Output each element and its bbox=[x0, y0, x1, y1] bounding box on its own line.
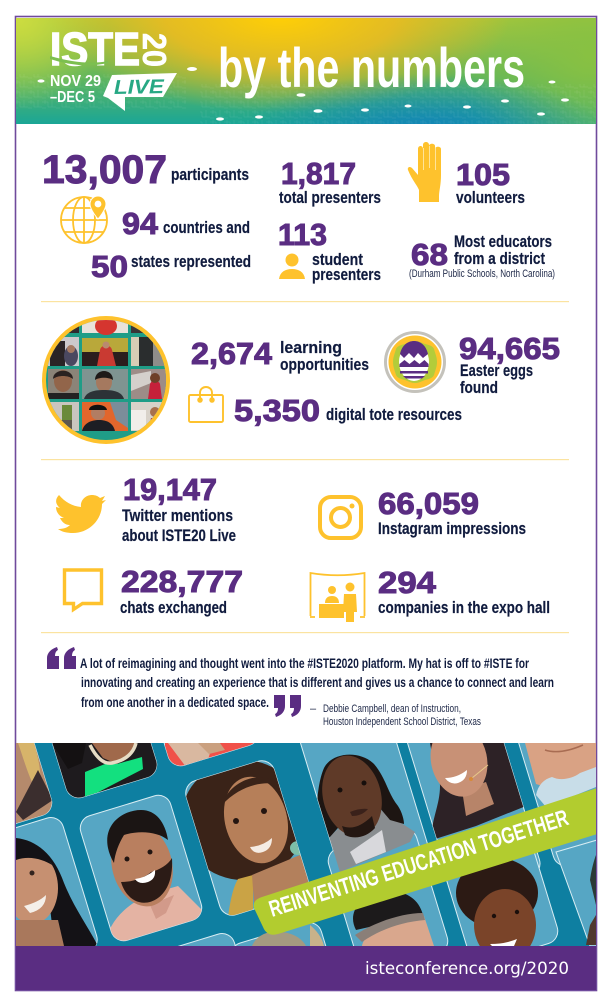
photo: woman with blonde hair bbox=[16, 743, 56, 823]
stat: student presenters: 113 bbox=[278, 217, 327, 252]
stat: companies in the expo hall: companies in the expo hall bbox=[378, 598, 550, 617]
photo: woman with short curly hair bbox=[456, 860, 538, 946]
footer bar bbox=[16, 946, 596, 990]
section: participants and presenters bbox=[42, 142, 555, 284]
stat: chats exchanged: chats exchanged bbox=[120, 598, 227, 617]
header banner bbox=[16, 18, 596, 124]
photo: man in black hat bbox=[353, 891, 434, 946]
quote attribution: – bbox=[310, 703, 317, 715]
icon: expo booth bbox=[310, 573, 365, 622]
icon: Instagram bbox=[320, 497, 361, 538]
stat: countries bbox=[122, 206, 250, 241]
header logo: ISTE20 Live: –DEC 5 bbox=[50, 89, 95, 106]
stat: companies in the expo hall bbox=[378, 565, 550, 617]
icon: chat bubble bbox=[64, 570, 102, 610]
stat: most educators from a district: Most educators bbox=[454, 232, 552, 251]
quote text bbox=[80, 655, 554, 710]
stat: most educators from a district bbox=[409, 232, 555, 280]
stat: volunteers: 105 bbox=[456, 157, 510, 192]
photo: woman in red bbox=[165, 743, 254, 766]
stat: total presenters bbox=[279, 156, 381, 207]
header logo: ISTE20 Live: LIVE bbox=[114, 76, 165, 99]
footer URL: isteconference.org/2020 bbox=[365, 959, 569, 979]
icon: globe with map pin bbox=[61, 196, 107, 243]
stat: student presenters bbox=[278, 217, 381, 284]
header logo: ISTE20 Live: 20 bbox=[136, 33, 173, 67]
photo: woman with headset bbox=[430, 743, 524, 838]
stat: Easter eggs found: 94,665 bbox=[459, 331, 560, 366]
stat: participants bbox=[42, 148, 249, 192]
stat: total presenters: 1,817 bbox=[281, 156, 356, 191]
testimonial quote bbox=[47, 647, 554, 728]
stat: Easter eggs found: found bbox=[460, 378, 498, 397]
stat: participants: participants bbox=[171, 165, 249, 184]
stat: chats exchanged: 228,777 bbox=[121, 564, 243, 599]
stat: most educators from a district: 68 bbox=[411, 237, 448, 272]
stat: Easter eggs found bbox=[459, 331, 560, 397]
stat: total presenters: total presenters bbox=[279, 188, 381, 207]
stat: learning opportunities bbox=[191, 336, 369, 374]
photo: woman with black hair bbox=[16, 838, 96, 946]
quote attribution: Debbie Campbell, dean of Instruction, bbox=[323, 703, 461, 715]
photo: smiling man top right bbox=[525, 743, 596, 807]
icon: raised hand bbox=[408, 142, 441, 202]
quote text: from one another in a dedicated space. bbox=[81, 694, 269, 710]
stat: learning opportunities: learning bbox=[280, 338, 342, 357]
icon: tote bag bbox=[189, 387, 223, 422]
section: social media and expo bbox=[56, 472, 550, 622]
stat: volunteers bbox=[456, 157, 525, 207]
stat: companies in the expo hall: 294 bbox=[378, 565, 437, 600]
stat: digital tote resources bbox=[234, 393, 462, 428]
stat: Twitter mentions: 19,147 bbox=[123, 472, 217, 507]
icon: Easter egg badge bbox=[386, 332, 444, 392]
stat: most educators from a district: from a district bbox=[454, 249, 545, 268]
stat: Instagram impressions: Instagram impressions bbox=[378, 519, 526, 538]
stat: most educators from a district: (Durham Public Schools, North Carolina) bbox=[409, 268, 555, 280]
photo: man with dreadlocks bbox=[314, 749, 415, 872]
stat: Twitter mentions: Twitter mentions bbox=[122, 506, 233, 525]
stat: student presenters: student bbox=[312, 250, 363, 269]
photo collage: video sessions circle bbox=[42, 316, 170, 444]
stat: Instagram impressions: 66,059 bbox=[378, 486, 479, 521]
header logo: ISTE20 Live bbox=[50, 23, 177, 111]
header logo: ISTE20 Live: NOV 29 bbox=[50, 73, 101, 90]
photo collage: educators bbox=[16, 743, 596, 946]
quote attribution bbox=[310, 703, 481, 728]
icon: opening quote marks bbox=[47, 647, 76, 669]
stat: Easter eggs found: Easter eggs bbox=[460, 361, 533, 380]
header logo: ISTE20 Live: ISTE bbox=[50, 23, 140, 75]
photo: partial heads at bottom bbox=[252, 855, 596, 946]
photo: woman with curly hair bbox=[186, 762, 308, 916]
stat: states: states represented bbox=[131, 252, 251, 271]
stat: participants: 13,007 bbox=[42, 148, 167, 192]
stat: learning opportunities: opportunities bbox=[280, 355, 369, 374]
stat: countries: countries and bbox=[163, 218, 250, 237]
stat: states bbox=[91, 249, 251, 284]
stat: Instagram impressions bbox=[378, 486, 526, 538]
stat: countries: 94 bbox=[122, 206, 159, 241]
stat: learning opportunities: 2,674 bbox=[191, 336, 273, 371]
icon: Twitter bird bbox=[56, 495, 106, 533]
stat: digital tote resources: digital tote resources bbox=[326, 405, 462, 424]
stat: chats exchanged bbox=[120, 564, 243, 617]
photo: woman in green shirt bbox=[52, 743, 157, 798]
section: learning bbox=[42, 316, 560, 444]
stat: volunteers: volunteers bbox=[456, 188, 525, 207]
stat: states: 50 bbox=[91, 249, 128, 284]
stat: student presenters: presenters bbox=[312, 265, 381, 284]
stat: digital tote resources: 5,350 bbox=[234, 393, 320, 428]
stat: Twitter mentions: about ISTE20 Live bbox=[122, 526, 236, 545]
photo: smiling bearded man bbox=[107, 810, 202, 941]
icon: person bbox=[279, 254, 305, 279]
quote attribution: Houston Independent School District, Texas bbox=[323, 716, 481, 728]
stat: Twitter mentions bbox=[122, 472, 236, 545]
icon: closing quote marks bbox=[274, 695, 301, 717]
